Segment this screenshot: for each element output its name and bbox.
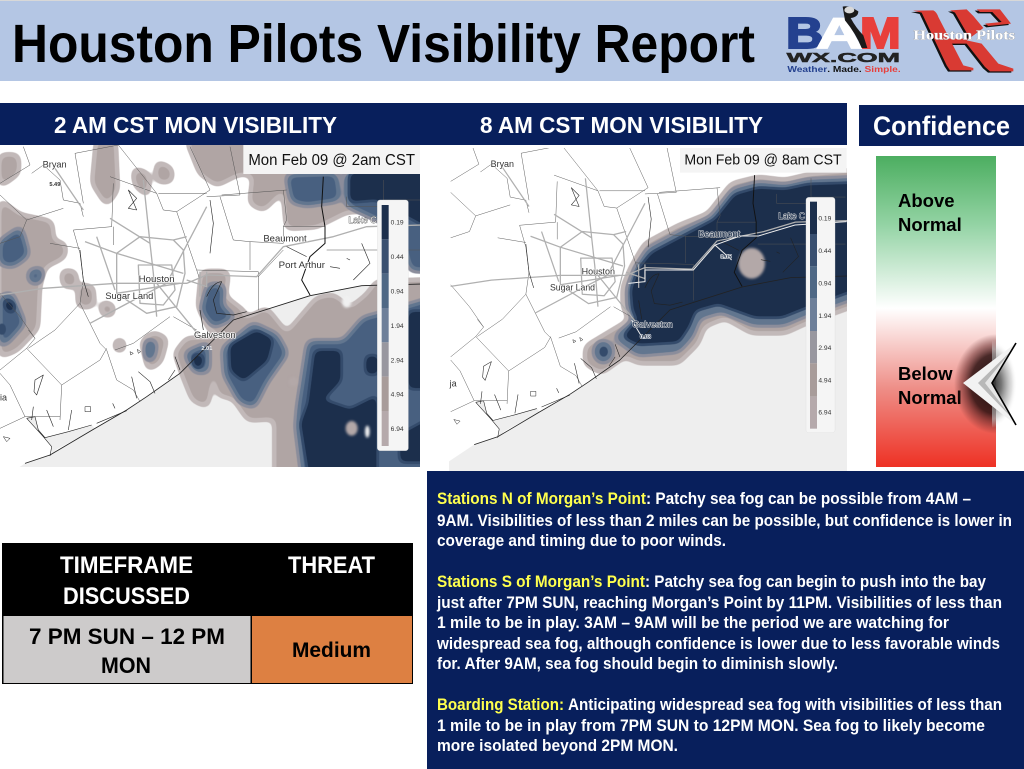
threat table bbox=[2, 543, 413, 684]
text: boarding station bbox=[437, 696, 1002, 755]
text: boarding station: 1 mile to be in play from 7PM SUN to 12PM MON. Sea fog to likely become bbox=[437, 717, 985, 735]
legend: 6.94 bbox=[391, 426, 404, 433]
label: above normal: Normal bbox=[898, 214, 962, 235]
city labels: Lake C bbox=[778, 211, 805, 221]
heading: 2 AM map: 2 AM CST MON VISIBILITY bbox=[54, 112, 337, 138]
icon: confidence arrow pointer bbox=[955, 335, 1017, 433]
city labels: ia bbox=[0, 393, 7, 403]
legend: 6.94 bbox=[818, 410, 832, 417]
city labels bbox=[449, 159, 805, 388]
legend: 1.94 bbox=[391, 323, 404, 330]
city labels: Beaumont bbox=[698, 229, 741, 239]
legend: 0.44 bbox=[818, 248, 832, 255]
text: stations south bbox=[436, 573, 1002, 673]
city labels: Houston bbox=[582, 267, 615, 277]
cell: timeframe value: 7 PM SUN – 12 PM bbox=[29, 624, 225, 649]
text: stations north: coverage and timing due to poor winds. bbox=[437, 532, 726, 550]
label: below normal: Below bbox=[898, 363, 953, 384]
cell: threat level bbox=[252, 616, 412, 683]
text: stations south: 1 mile to be in play. 3AM – 9AM will be the period we are watching for bbox=[437, 614, 950, 632]
legend: 0.19 bbox=[818, 216, 832, 223]
cell: timeframe value bbox=[4, 616, 250, 683]
city labels: Galveston bbox=[194, 330, 236, 340]
text: stations south: Stations S of Morgan’s Point bbox=[437, 573, 645, 591]
map header bar bbox=[0, 103, 847, 145]
logo: BAM WX.COM: WX.COM bbox=[787, 50, 900, 65]
city labels: Beaumont bbox=[263, 233, 307, 243]
timestamp: Mon Feb 09 @ 8am CST bbox=[684, 151, 842, 168]
city labels bbox=[0, 160, 377, 403]
panel: confidence heading: Confidence bbox=[873, 111, 1010, 141]
legend bbox=[377, 200, 408, 451]
legend bbox=[806, 197, 835, 433]
city labels: Sugar Land bbox=[105, 291, 153, 301]
city labels: Houston bbox=[139, 274, 175, 284]
logo: Houston Pilots: Houston Pilots bbox=[913, 28, 1016, 43]
panel: station discussion bbox=[427, 471, 1024, 769]
text: stations north: Stations N of Morgan’s Point bbox=[437, 490, 646, 508]
map: 2 AM visibility bbox=[0, 145, 420, 467]
legend: 4.94 bbox=[818, 378, 832, 385]
city labels: 5.49 bbox=[49, 182, 60, 188]
column header: timeframe: TIMEFRAME bbox=[60, 552, 193, 579]
panel: confidence heading bbox=[859, 105, 1024, 146]
timestamp: Mon Feb 09 @ 2am CST bbox=[248, 152, 416, 169]
title: Houston Pilots Visibility Report bbox=[12, 14, 755, 74]
legend: 4.94 bbox=[391, 392, 404, 399]
cell: threat level: Medium bbox=[292, 639, 371, 662]
city labels: 0.05 bbox=[720, 255, 731, 261]
logo: BAM WX.COM bbox=[786, 6, 901, 74]
text: stations north: : Patchy sea fog can be possible from 4AM – bbox=[646, 490, 971, 508]
legend: 0.44 bbox=[391, 254, 404, 261]
city labels: ja bbox=[449, 378, 457, 388]
legend: 0.19 bbox=[391, 219, 404, 226]
text: boarding station: more isolated beyond 2PM MON. bbox=[437, 737, 678, 755]
confidence gradient scale bbox=[876, 156, 996, 467]
city labels: Bryan bbox=[43, 160, 67, 170]
legend: 1.94 bbox=[818, 313, 832, 320]
text: boarding station: Boarding Station: bbox=[437, 696, 564, 714]
map: 8 AM visibility bbox=[449, 148, 847, 471]
legend: 0.94 bbox=[818, 280, 832, 287]
logo: Houston Pilots bbox=[911, 9, 1016, 73]
column header: timeframe: DISCUSSED bbox=[63, 583, 190, 610]
logo: BAM WX.COM: Weather . Made. Simple. bbox=[787, 64, 901, 74]
legend: 2.94 bbox=[391, 357, 404, 364]
timestamp bbox=[243, 145, 420, 174]
logo: BAM WX.COM: B bbox=[786, 10, 823, 58]
logo: BAM WX.COM: M bbox=[860, 10, 901, 58]
legend: 0.94 bbox=[391, 288, 404, 295]
city labels: Lake C bbox=[348, 215, 377, 225]
city labels: Sugar Land bbox=[550, 283, 595, 293]
city labels: Galveston bbox=[632, 320, 673, 330]
city labels: 2.01 bbox=[201, 346, 212, 352]
column header: threat: THREAT bbox=[288, 552, 375, 579]
heading: 8 AM map: 8 AM CST MON VISIBILITY bbox=[480, 112, 763, 138]
legend: 2.94 bbox=[818, 345, 832, 352]
text: stations south: : Patchy sea fog can begin to push into the bay bbox=[645, 573, 987, 591]
label: below normal: Normal bbox=[898, 387, 962, 408]
cell: timeframe value: MON bbox=[101, 653, 151, 678]
text: stations north bbox=[437, 490, 1012, 550]
timestamp bbox=[680, 148, 847, 173]
city labels: Bryan bbox=[491, 159, 514, 169]
text: stations south: for. After 9AM, sea fog should begin to diminish slowly. bbox=[437, 655, 838, 673]
label: above normal: Above bbox=[898, 190, 955, 211]
title banner bbox=[0, 0, 1024, 81]
city labels: 0.03 bbox=[640, 335, 651, 341]
logo: BAM WX.COM: A bbox=[816, 10, 863, 58]
city labels: Port Arthur bbox=[279, 260, 325, 270]
